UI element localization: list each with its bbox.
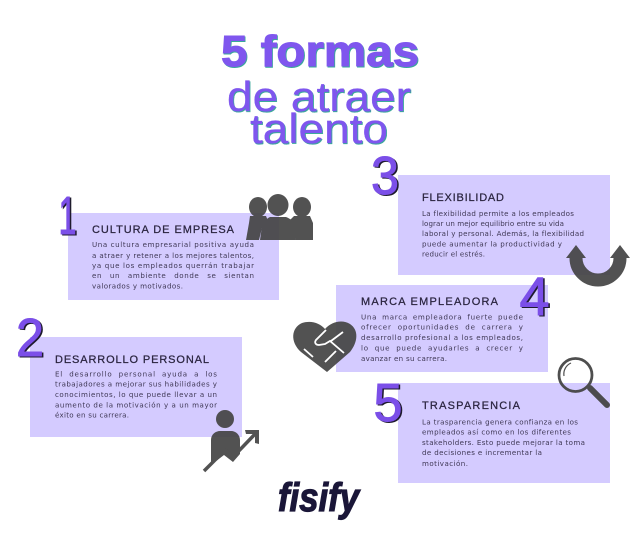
text block: trasparencia xyxy=(422,418,585,468)
text block: flexibilidad: La flexibilidad permite a los empleados xyxy=(422,209,574,218)
icon: person with rising arrow xyxy=(204,410,259,471)
text block: desarrollo personal xyxy=(55,370,217,420)
text block: cultura de empresa: en un ambiente donde se sientan xyxy=(92,271,254,280)
text block: desarrollo personal: conocimientos, lo que puede llevar a un xyxy=(55,390,217,399)
text block: marca empleadora: lo que puede ayudarles a crecer y xyxy=(361,344,523,352)
icon: u-turn arrows xyxy=(566,245,630,280)
icon: group of people xyxy=(246,194,313,240)
text block: cultura de empresa: valorados y motivados. xyxy=(92,282,183,290)
text block: marca empleadora: Una marca empleadora fuerte puede xyxy=(361,312,523,322)
heading: desarrollo personal: DESARROLLO PERSONAL xyxy=(55,354,209,366)
icon: heart with handshake xyxy=(293,322,356,372)
text block: trasparencia: empleados así como en los diferentes xyxy=(422,428,571,436)
text block: marca empleadora: ofrecer oportunidades de carrera y xyxy=(361,322,523,332)
title: de atraer xyxy=(228,74,412,121)
number 3: 3 xyxy=(372,147,400,207)
number 5: 5 xyxy=(375,374,404,434)
text block: trasparencia: motivación. xyxy=(422,459,468,468)
text block: cultura de empresa: a atraer y retener a los mejores talentos, xyxy=(92,251,254,260)
panel: marca empleadora xyxy=(336,285,548,372)
logo: fisify: fisify xyxy=(278,476,361,520)
text block: marca empleadora xyxy=(361,312,523,363)
heading: flexibilidad: FLEXIBILIDAD xyxy=(422,192,504,204)
text block: marca empleadora: desarrollo profesional a los empleados, xyxy=(361,333,523,342)
text block: desarrollo personal: éxito en su carrera. xyxy=(55,410,129,420)
text block: trasparencia: stakeholders. Esto puede mejorar la toma xyxy=(422,438,585,447)
text block: trasparencia: de decisiones e incrementar la xyxy=(422,448,542,457)
number 3: 3 xyxy=(371,146,399,206)
heading: cultura de empresa: CULTURA DE EMPRESA xyxy=(92,224,235,236)
number 4: 4 xyxy=(520,267,550,327)
text block: cultura de empresa xyxy=(92,240,254,290)
panel: cultura de empresa xyxy=(68,213,279,300)
number 5: 5 xyxy=(374,373,402,433)
title: talento xyxy=(250,105,388,152)
title xyxy=(221,27,420,153)
title: talento xyxy=(251,106,389,153)
icon: magnifying glass xyxy=(559,358,607,405)
text block: marca empleadora: avanzar en su carrera. xyxy=(361,354,447,363)
text block: trasparencia: La trasparencia genera confianza en los xyxy=(422,418,578,426)
text block: flexibilidad: reducir el estrés. xyxy=(422,250,485,258)
number 1: 1 xyxy=(60,187,78,247)
number 4: 4 xyxy=(521,268,551,328)
text block: cultura de empresa: ya que los empleados querrán trabajar xyxy=(92,261,254,270)
title: 5 formas xyxy=(222,28,420,77)
text block: flexibilidad xyxy=(422,209,584,258)
title: de atraer xyxy=(227,73,411,120)
heading: marca empleadora: MARCA EMPLEADORA xyxy=(361,296,499,308)
number 2: 2 xyxy=(18,309,46,369)
panel: desarrollo personal xyxy=(30,337,242,437)
text block: flexibilidad: puede aumentar la productividad y xyxy=(422,240,562,248)
text block: cultura de empresa: Una cultura empresarial positiva ayuda xyxy=(92,240,254,249)
title: 5 formas xyxy=(221,27,419,76)
text block: flexibilidad: lograr un mejor equilibrio entre su vida xyxy=(422,219,564,228)
text block: flexibilidad: laboral y personal. Además, la flexibilidad xyxy=(422,229,584,238)
number 1: 1 xyxy=(58,186,76,246)
text block: desarrollo personal: trabajadores a mejorar sus habilidades y xyxy=(55,380,217,388)
number 2: 2 xyxy=(16,308,44,368)
heading: trasparencia: TRASPARENCIA xyxy=(422,400,521,412)
panel: trasparencia xyxy=(398,383,610,483)
text block: desarrollo personal: aumento de la motivación y a un mayor xyxy=(55,400,217,410)
number 1 xyxy=(58,186,78,247)
text block: desarrollo personal: El desarrollo personal ayuda a los xyxy=(55,370,217,378)
panel: flexibilidad xyxy=(398,175,610,275)
